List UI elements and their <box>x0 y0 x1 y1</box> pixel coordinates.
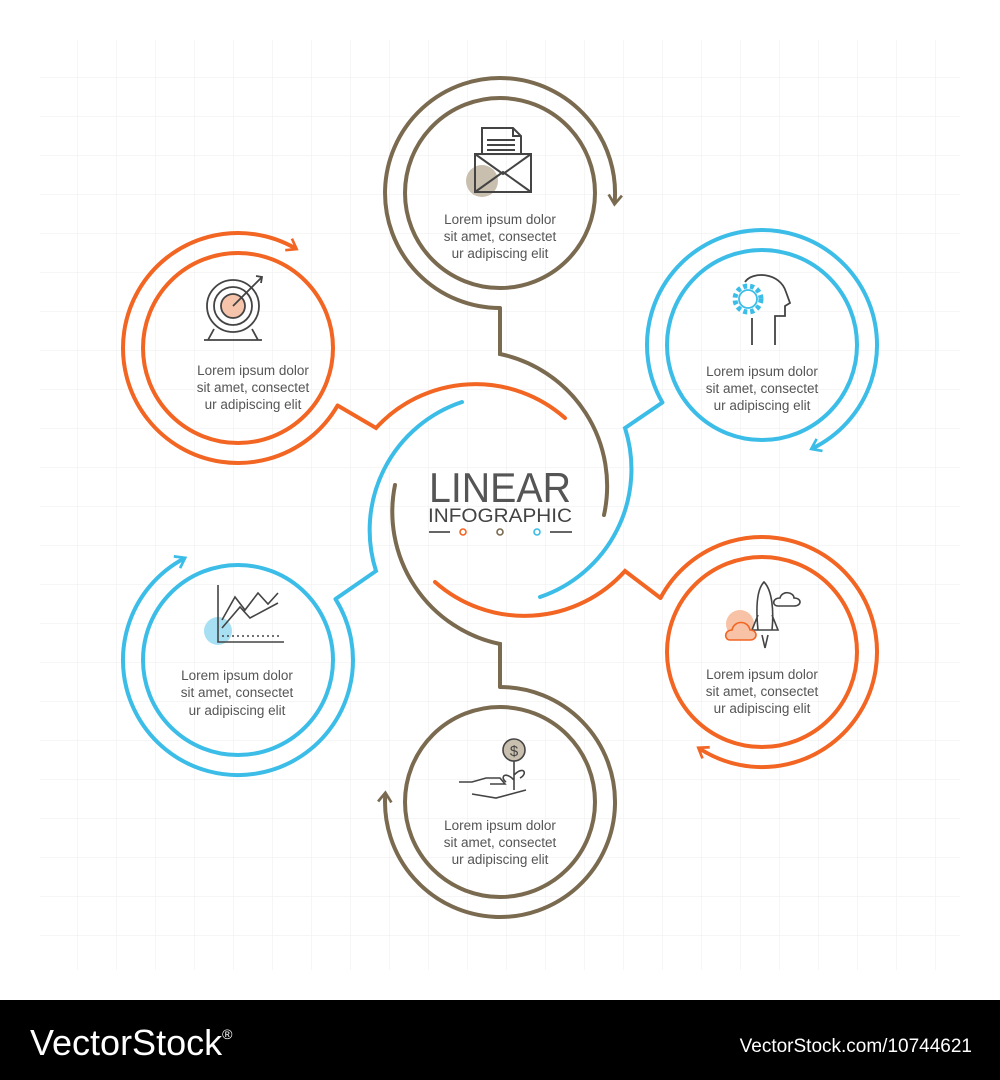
text: left node: ur adipiscing elit <box>189 703 286 718</box>
title: LINEAR <box>429 464 571 511</box>
hub: orange bottom arc <box>435 571 660 616</box>
text: top-left node: ur adipiscing elit <box>205 397 302 412</box>
node: bottom brown <box>385 687 615 917</box>
node: right-bottom orange <box>660 537 877 767</box>
hub: brown bottom arc <box>392 485 500 687</box>
icon: rocket and clouds <box>726 582 800 648</box>
hub: brown top arc <box>500 308 607 515</box>
icon: target <box>204 276 262 340</box>
hub: blue right arc <box>540 402 662 597</box>
text: top node: sit amet, consectet <box>444 229 557 244</box>
icon: chart <box>204 585 284 645</box>
title <box>428 464 572 535</box>
text: right-top node: sit amet, consectet <box>706 381 819 396</box>
text: bottom node: sit amet, consectet <box>444 835 557 850</box>
text: right-top node: Lorem ipsum dolor <box>706 364 818 379</box>
text: bottom node: Lorem ipsum dolor <box>444 818 556 833</box>
text: right-bottom node: Lorem ipsum dolor <box>706 667 818 682</box>
icon: head with gear <box>735 275 790 345</box>
node: left blue <box>123 558 353 775</box>
text: top-left node: sit amet, consectet <box>197 380 310 395</box>
node: right-top blue <box>647 230 877 448</box>
text: bottom node: ur adipiscing elit <box>452 852 549 867</box>
text: left node: sit amet, consectet <box>181 685 294 700</box>
title: INFOGRAPHIC <box>428 506 572 527</box>
footer bar: VectorStock <box>30 1022 222 1063</box>
text: left node: Lorem ipsum dolor <box>181 668 293 683</box>
icon: envelope <box>466 128 531 197</box>
hub: blue left arc <box>336 402 462 599</box>
node: top brown <box>385 78 615 308</box>
text: right-top node: ur adipiscing elit <box>714 398 811 413</box>
footer bar <box>0 1000 1000 1080</box>
text: top node: ur adipiscing elit <box>452 246 549 261</box>
footer bar: ® <box>222 1026 233 1042</box>
text: right-bottom node: ur adipiscing elit <box>714 701 811 716</box>
text: top-left node: Lorem ipsum dolor <box>197 363 309 378</box>
node: top-left orange <box>123 233 338 463</box>
hub: orange top arc <box>338 384 565 428</box>
icon: hand with coin <box>459 739 526 798</box>
icon: hand with coin: $ <box>510 743 519 760</box>
footer bar: VectorStock.com/10744621 <box>740 1036 972 1057</box>
text: right-bottom node: sit amet, consectet <box>706 684 819 699</box>
text: top node: Lorem ipsum dolor <box>444 212 556 227</box>
